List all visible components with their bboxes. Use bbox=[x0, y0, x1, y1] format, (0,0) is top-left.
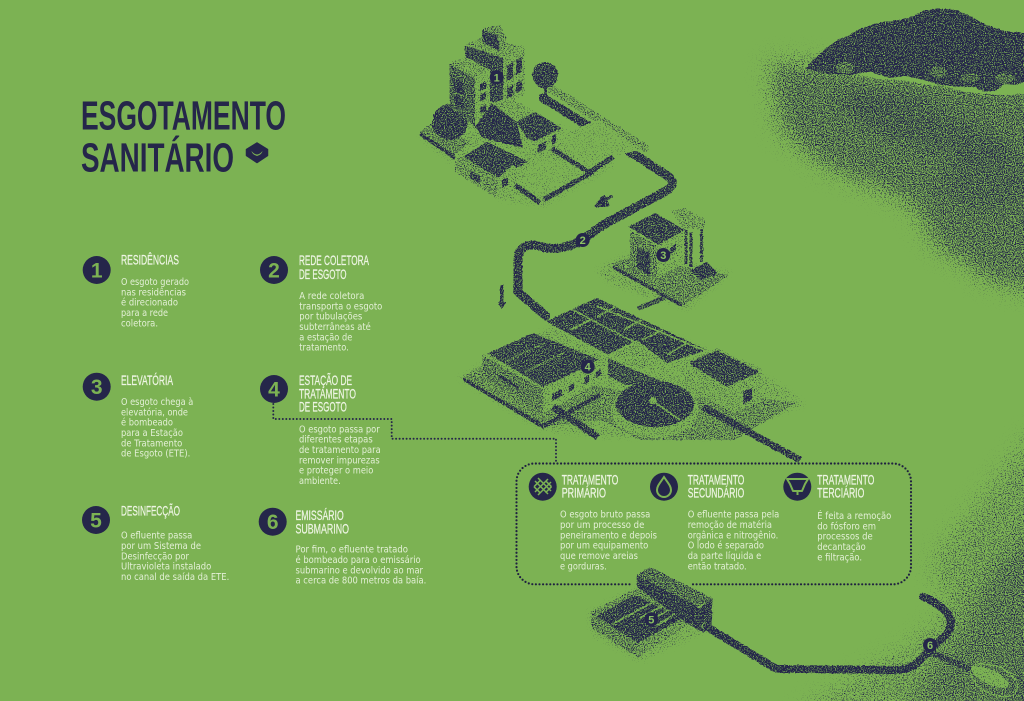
marker 6: 6 bbox=[927, 640, 933, 652]
step 2: collection network: REDE COLETORA bbox=[299, 252, 369, 268]
step 4: treatment plant bbox=[260, 372, 381, 487]
tertiary treatment: e filtração. bbox=[817, 552, 862, 563]
step 5: disinfection: O efluente passa bbox=[121, 531, 192, 542]
step 3: lift station: de Esgoto (ETE). bbox=[121, 449, 190, 460]
pipe: submarine outfall bbox=[707, 597, 1023, 701]
marker 2: 2 bbox=[580, 235, 586, 247]
marker 3: 3 bbox=[660, 250, 666, 262]
tertiary treatment: do fósforo em bbox=[817, 521, 876, 532]
tertiary treatment: processos de bbox=[817, 532, 873, 543]
step 2: collection network: 2 bbox=[268, 260, 280, 282]
step 4: treatment plant: ambiente. bbox=[299, 476, 341, 487]
marker 5: 5 bbox=[648, 614, 654, 626]
step 3: lift station: O esgoto chega à bbox=[121, 397, 193, 408]
arrow: downward flow bbox=[497, 285, 506, 309]
tertiary treatment: TERCIÁRIO bbox=[817, 485, 864, 501]
primary treatment bbox=[529, 471, 657, 572]
tertiary treatment: É feita a remoção bbox=[817, 510, 892, 522]
step 1: residences: RESIDÊNCIAS bbox=[121, 252, 179, 268]
secondary treatment: TRATAMENTO bbox=[688, 471, 744, 487]
step 2: collection network: tratamento. bbox=[299, 343, 349, 354]
secondary treatment: O efluente passa pela bbox=[688, 510, 779, 521]
step 5: disinfection: Desinfecção por bbox=[121, 551, 189, 562]
step 1: residences: nas residências bbox=[121, 287, 186, 298]
primary treatment: peneiramento e depois bbox=[560, 530, 657, 541]
dotted connector from step 4 to treatment box bbox=[273, 404, 556, 463]
step 5: disinfection bbox=[82, 503, 229, 583]
secondary treatment: remoção de matéria bbox=[688, 520, 772, 531]
step 5: disinfection: no canal de saída da ETE. bbox=[121, 572, 229, 583]
step 6: submarine outfall: Por fim, o efluente tratado bbox=[296, 545, 408, 556]
marker 6 bbox=[923, 638, 937, 652]
primary treatment: por um equipamento bbox=[560, 541, 649, 552]
panel: treatment stages bbox=[516, 464, 911, 584]
step 4: treatment plant: remover impurezas bbox=[299, 455, 380, 466]
step 5: disinfection: 5 bbox=[90, 510, 102, 532]
step 1: residences: é direcionado bbox=[121, 298, 178, 309]
step 1: residences: para a rede bbox=[121, 308, 168, 319]
marker 4 bbox=[581, 360, 595, 374]
sea: upper bay bbox=[765, 60, 1024, 300]
primary treatment: TRATAMENTO bbox=[562, 471, 618, 487]
primary treatment: O esgoto bruto passa bbox=[560, 510, 650, 521]
step 2: collection network: DE ESGOTO bbox=[299, 266, 347, 282]
pipe: collection network bbox=[518, 88, 672, 316]
disinfection unit bbox=[588, 567, 713, 662]
arrow: down-left flow bbox=[596, 196, 612, 206]
step 3: lift station: para a Estação bbox=[121, 428, 183, 439]
title bbox=[81, 92, 286, 180]
icon: title mark bbox=[246, 143, 268, 162]
step 6: submarine outfall: a cerca de 800 metros da baía. bbox=[296, 576, 426, 587]
primary treatment: por um processo de bbox=[560, 520, 645, 531]
step 3: lift station: de Tratamento bbox=[121, 438, 183, 449]
step 1: residences: O esgoto gerado bbox=[121, 277, 189, 288]
beach strip bbox=[800, 40, 1024, 95]
step 2: collection network: A rede coletora bbox=[299, 291, 364, 302]
step 4: treatment plant: e proteger o meio bbox=[299, 466, 374, 477]
step 5: disinfection: por um Sistema de bbox=[121, 541, 201, 552]
step 5: disinfection: DESINFECÇÃO bbox=[121, 503, 180, 519]
step 1: residences bbox=[83, 252, 189, 329]
primary treatment: PRIMÁRIO bbox=[562, 485, 606, 501]
step 1: residences: 1 bbox=[91, 260, 103, 282]
title: ESGOTAMENTO bbox=[81, 92, 286, 138]
step 4: treatment plant: diferentes etapas bbox=[299, 435, 373, 446]
step 2: collection network: transporta o esgoto bbox=[299, 301, 383, 312]
step 4: treatment plant: O esgoto passa por bbox=[299, 424, 380, 435]
step 6: submarine outfall: EMISSÁRIO bbox=[296, 507, 344, 523]
marker 2 bbox=[576, 233, 590, 247]
secondary treatment: SECUNDÁRIO bbox=[688, 485, 744, 501]
step 3: lift station: 3 bbox=[91, 376, 103, 399]
secondary treatment: orgânica e nitrogênio. bbox=[688, 530, 778, 541]
secondary treatment: então tratado. bbox=[688, 561, 747, 572]
step 6: submarine outfall: submarino e devolvido ao mar bbox=[296, 565, 423, 576]
tertiary treatment: decantação bbox=[817, 542, 866, 553]
marker 1 bbox=[490, 70, 504, 84]
step 6: submarine outfall: 6 bbox=[267, 511, 279, 534]
residences bbox=[420, 25, 640, 206]
step 4: treatment plant: DE ESGOTO bbox=[299, 399, 347, 415]
step 6: submarine outfall bbox=[259, 507, 426, 587]
step 6: submarine outfall: é bombeado para o emissário bbox=[296, 555, 421, 566]
secondary treatment bbox=[650, 471, 779, 572]
lift station bbox=[595, 208, 732, 310]
step 5: disinfection: Ultravioleta instalado bbox=[121, 562, 212, 573]
treatment plant bbox=[458, 298, 806, 460]
primary treatment: que remove areias bbox=[560, 551, 638, 562]
step 1: residences: coletora. bbox=[121, 318, 158, 329]
sea: lower bay bbox=[790, 400, 1024, 701]
step 3: lift station: elevatória, onde bbox=[121, 407, 188, 418]
step 4: treatment plant: de tratamento para bbox=[299, 445, 381, 456]
dotted panel border bbox=[516, 464, 911, 584]
marker 1: 1 bbox=[494, 72, 500, 84]
tertiary treatment bbox=[783, 471, 892, 563]
step 2: collection network: a estação de bbox=[299, 332, 353, 343]
step 3: lift station: ELEVATÓRIA bbox=[121, 372, 173, 388]
step 6: submarine outfall: SUBMARINO bbox=[296, 520, 349, 536]
step 2: collection network bbox=[260, 252, 383, 354]
primary treatment: e gorduras. bbox=[560, 561, 607, 572]
marker 5 bbox=[644, 612, 658, 626]
step 4: treatment plant: TRATAMENTO bbox=[299, 385, 356, 401]
marker 3 bbox=[656, 248, 670, 262]
illustration: stippled scenery bbox=[420, 8, 1024, 701]
marker 4: 4 bbox=[585, 362, 592, 374]
step 4: treatment plant: ESTAÇÃO DE bbox=[299, 372, 352, 388]
tertiary treatment: TRATAMENTO bbox=[817, 471, 874, 487]
step 3: lift station: é bombeado bbox=[121, 418, 173, 429]
secondary treatment: O lodo é separado bbox=[688, 541, 764, 552]
step 2: collection network: por tubulações bbox=[299, 312, 362, 323]
step 4: treatment plant: 4 bbox=[268, 378, 280, 402]
dotted connector to plant bbox=[560, 412, 600, 414]
island bbox=[806, 8, 1024, 92]
secondary treatment: da parte líquida e bbox=[688, 551, 762, 562]
step 3: lift station bbox=[83, 372, 193, 460]
step 2: collection network: subterrâneas até bbox=[299, 322, 371, 333]
title: SANITÁRIO bbox=[81, 134, 234, 180]
